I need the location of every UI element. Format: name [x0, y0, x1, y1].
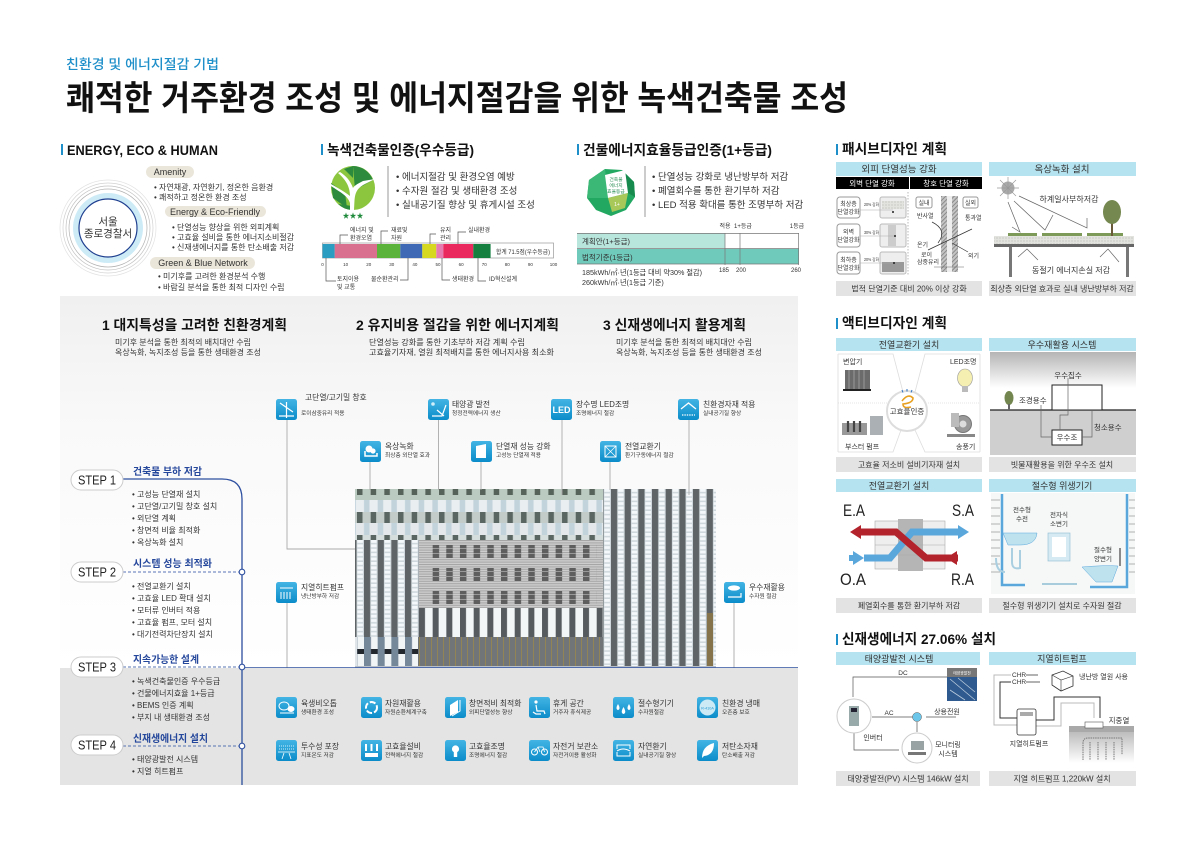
chart: score bar: 에너지 및 — [350, 226, 374, 234]
pill: amenity: Amenity — [154, 167, 187, 177]
heading: energy efficiency: 건물에너지효율등급인증(1+등급) — [583, 142, 772, 158]
step 3: • 건물에너지효율 1+등급 — [132, 688, 215, 698]
card: solar: 태양광발전(PV) 시스템 146kW 설치 — [847, 774, 969, 784]
diagram: rainwater: 우수조 — [1057, 433, 1077, 442]
step 3: STEP 3 — [78, 660, 116, 674]
chart: score bar: 환경오염 — [350, 234, 372, 242]
diagram: wall sections: 단열강화 — [837, 208, 860, 216]
icon: natural ventilation: 실내공기질 향상 — [638, 751, 677, 759]
title: 쾌적한 거주환경 조성 및 에너지절감을 위한 녹색건축물 조성 — [66, 80, 848, 118]
chart: score bar: 70 — [482, 262, 487, 267]
chart: score bar: 80 — [505, 262, 510, 267]
icon: water saving: 수자원절감 — [638, 708, 665, 716]
diagram: wall sections: 단열강화 — [837, 236, 860, 244]
text: energy bullets: • 고효율 설비을 통한 에너지소비절감 — [172, 232, 295, 242]
chart: score bar: 재료및 — [391, 226, 408, 234]
icon: biotope — [276, 697, 337, 718]
diagram: window section: 삼중유리 — [917, 258, 939, 266]
diagram: window section: 온기 — [917, 241, 928, 249]
chart: efficiency bars: 185 — [719, 268, 730, 274]
diagram: rainwater: 조경용수 — [1019, 395, 1047, 405]
text: efficiency notes — [582, 268, 702, 287]
heading: plan 1: 미기후 분석을 통한 최적의 배치대안 수립 — [115, 337, 251, 347]
feature: geothermal heat pump — [276, 582, 344, 603]
card: envelope insulation — [836, 162, 982, 296]
feature: rooftop greening: 최상층 외단열 효과 — [385, 451, 431, 459]
diagram: HRV airflow: R.A — [951, 570, 975, 589]
step 2: • 고효율 LED 확대 설치 — [132, 593, 211, 603]
step 1: • 외단열 계획 — [132, 513, 176, 523]
text: green bullets: • 에너지절감 및 환경오염 예방 — [396, 171, 515, 183]
diagram: wall sections: 20% 강화 — [864, 201, 879, 208]
text: amenity bullets — [154, 182, 273, 202]
step 1: • 고단열/고기밀 창호 설치 — [132, 501, 217, 511]
feature: solar power: 태양광 발전 — [452, 399, 490, 409]
step 4: 신재생에너지 설치 — [133, 732, 208, 745]
diagram: geothermal system: 지열히트펌프 — [1010, 739, 1049, 748]
text: network bullets: • 미기후를 고려한 환경분석 수행 — [158, 271, 265, 281]
step 2 — [71, 557, 213, 639]
icon: efficiency badge: 에너지 — [609, 182, 623, 189]
text: energy bullets: • 단열성능 향상을 위한 외피계획 — [172, 222, 279, 232]
diagram: high efficiency hub: 변압기 — [843, 357, 862, 366]
feature: heat recovery ventilator: 환기구동에너지 절감 — [625, 451, 674, 459]
card: geothermal: 지열히트펌프 — [1037, 653, 1087, 664]
feature: LED lighting: LED — [552, 405, 571, 415]
diagram: high efficiency hub: LED조명 — [950, 357, 976, 366]
icon: bicycle storage: 자전거 보관소 — [553, 741, 598, 751]
diagram: window section: 통과열 — [965, 214, 982, 222]
diagram: solar system — [837, 668, 977, 763]
diagram: window section — [916, 196, 982, 272]
diagram: sanitary fixtures: 절수형 — [1094, 546, 1112, 554]
icon: high efficiency equipment — [361, 740, 424, 761]
card: rainwater system: 빗물재활용을 위한 우수조 설치 — [1011, 460, 1113, 470]
text: green bullets — [396, 171, 535, 211]
chart: score bar: 30 — [389, 262, 395, 267]
diagram: rainwater: 우수집수 — [1054, 370, 1082, 380]
icon: efficiency badge: 건축물 — [609, 176, 623, 183]
icon: water saving — [613, 697, 674, 718]
diagram: HRV airflow: S.A — [952, 501, 975, 520]
heading: plan 2: 단열성능 강화를 통한 기초부하 저감 계획 수립 — [369, 337, 525, 347]
pill: amenity — [146, 166, 194, 178]
panel: green building certification — [321, 142, 558, 291]
text: energy bullets — [172, 222, 295, 252]
chart: score bar: 및 교통 — [337, 284, 356, 291]
panel: passive design — [836, 141, 1136, 296]
heading: plan 2: 2 유지비용 절감을 위한 에너지계획 — [356, 317, 559, 333]
text: efficiency bullets: • 단열성능 강화로 냉난방부하 저감 — [652, 171, 789, 183]
icon: high efficiency lighting: 고효율조명 — [469, 741, 505, 751]
card: envelope insulation: 외피 단열성능 강화 — [861, 164, 937, 176]
diagram: geothermal system: CHR — [1012, 672, 1026, 679]
icon: tree logo — [331, 166, 375, 220]
heading: plan 3: 미기후 분석을 통한 최적의 배치대안 수립 — [616, 337, 752, 347]
heading: energy eco human: ENERGY, ECO & HUMAN — [67, 142, 218, 158]
feature: insulation performance — [471, 441, 551, 462]
chart: score bar: 40 — [412, 262, 418, 267]
diagram: solar system: 시스템 — [938, 750, 958, 758]
panel: renewable energy — [836, 631, 1136, 786]
icon: window ratio — [445, 697, 521, 718]
diagram: concentric circles: 서울 — [98, 216, 118, 228]
timeline line — [123, 479, 242, 785]
icons row 1 — [276, 697, 760, 718]
feature: heat recovery ventilator — [600, 441, 674, 462]
heading: plan 3: 옥상녹화, 녹지조성 등을 통한 생태환경 조성 — [616, 347, 762, 357]
step 3: • 녹색건축물인증 우수등급 — [132, 676, 220, 686]
diagram: window section: 반사열 — [917, 212, 934, 220]
icon: permeable paving: 투수성 포장 — [301, 741, 339, 751]
feature: rooftop greening: 옥상녹화 — [385, 441, 414, 451]
step 2: • 고효율 펌프, 모터 설치 — [132, 617, 212, 627]
feature: geothermal heat pump: 냉난방부하 저감 — [301, 592, 340, 600]
chart: score bar: 50 — [435, 262, 441, 267]
step 2: • 대기전력차단장치 설치 — [132, 629, 213, 639]
heading: active: 액티브디자인 계획 — [842, 315, 947, 331]
feature: solar power — [428, 399, 501, 420]
feature: insulation performance: 단열재 성능 강화 — [496, 441, 551, 451]
feature: LED lighting: 조명에너지 절감 — [576, 409, 615, 417]
chart: score bar: 물순환관리 — [371, 275, 399, 283]
chart: score bar: 100 — [550, 262, 558, 267]
heading: plan 1: 옥상녹화, 녹지조성 등을 통한 생태환경 조성 — [115, 347, 261, 357]
chart: efficiency bars: 200 — [736, 268, 747, 274]
text: green bullets: • 실내공기질 향상 및 휴게시설 조성 — [396, 199, 535, 211]
text: energy bullets: • 신재생에너지를 통한 탄소배출 저감 — [172, 242, 295, 252]
step 3 — [71, 653, 220, 722]
card: envelope insulation: 창호 단열 강화 — [923, 178, 969, 188]
icon: recycling: 자원재활용 — [385, 698, 421, 708]
panel: active design — [836, 315, 1136, 613]
text: efficiency bullets — [652, 171, 804, 211]
feature: high insulation windows — [276, 392, 367, 420]
chart: score bar: 90 — [528, 262, 533, 267]
text: green bullets: • 수자원 절감 및 생태환경 조성 — [396, 185, 517, 197]
chart: efficiency bars: 적용 — [719, 223, 731, 230]
text: efficiency notes: 260kWh/㎡·년(1등급 기준) — [582, 278, 664, 287]
heading: plan 3 — [603, 317, 762, 357]
card: heat recovery ventilator — [836, 479, 982, 613]
diagram: sanitary fixtures: 소변기 — [1050, 519, 1068, 528]
card: solar — [836, 652, 980, 786]
chart: score bar — [321, 226, 558, 291]
chart: efficiency bars: 1+등급 — [734, 223, 752, 230]
panel: energy efficiency certification — [577, 142, 805, 287]
icon: bicycle storage: 자전거이용 활성화 — [553, 751, 597, 759]
chart: score bar: 생태환경 — [452, 275, 474, 283]
step 1: • 창면적 비율 최적화 — [132, 525, 201, 535]
diagram: solar system: AC — [884, 710, 894, 717]
icon: tree logo: ★★★ — [342, 212, 364, 220]
diagram: window section: 외기 — [968, 252, 979, 260]
diagram: solar system: DC — [898, 670, 908, 677]
diagram: sanitary fixtures: 양변기 — [1094, 554, 1112, 563]
icon: efficiency badge: 효율등급 — [607, 189, 625, 195]
diagram: green roof: 동절기 에너지손실 저감 — [1032, 265, 1111, 275]
chart: score bar: 10 — [343, 262, 349, 267]
steps timeline — [71, 465, 798, 785]
heading: plan 2: 고효율기자재, 열원 최적배치를 통한 에너지사용 최소화 — [369, 347, 554, 357]
step 1: 건축물 부하 저감 — [133, 465, 202, 478]
diagram: sanitary fixtures: 전자식 — [1050, 510, 1068, 519]
chart: efficiency bars — [577, 223, 805, 274]
feature: heat recovery ventilator: 전열교환기 — [625, 441, 661, 451]
diagram: green roof — [994, 177, 1134, 277]
diagram: concentric circles — [60, 180, 156, 276]
icon: bicycle storage — [529, 740, 598, 761]
icon: natural ventilation — [613, 740, 677, 761]
icon: high efficiency lighting: 조명에너지 절감 — [469, 751, 508, 759]
feature: eco materials — [678, 399, 755, 420]
diagram: window section: 로이 — [921, 251, 932, 259]
feature: geothermal heat pump: 지열히트펌프 — [301, 582, 344, 592]
text: amenity bullets: • 쾌적하고 정온한 환경 조성 — [154, 192, 247, 202]
icons row 2 — [276, 740, 758, 761]
diagram: wall sections: 단열강화 — [837, 264, 860, 272]
feature: insulation performance: 고성능 단열재 적용 — [496, 451, 541, 459]
diagram: HRV airflow — [840, 501, 975, 589]
chart: score bar: 합계 71.5점(우수등급) — [496, 248, 550, 256]
background — [60, 296, 798, 668]
card: roof greening: 최상층 외단열 효과로 실내 냉난방부하 저감 — [990, 284, 1134, 294]
chart: score bar: 실내환경 — [468, 226, 490, 234]
feature: rainwater reuse: 우수재활용 — [749, 582, 785, 592]
icon: efficiency badge: 1+ — [614, 202, 620, 208]
chart: score bar: 20 — [366, 262, 372, 267]
diagram: geothermal system: CHR — [1012, 679, 1026, 686]
card: high efficiency equipment: 고효율 저소비 설비기자재 설치 — [858, 460, 960, 470]
text: efficiency bullets: • 폐열회수를 통한 환기부하 저감 — [652, 185, 780, 197]
diagram: wall sections: 최하층 — [840, 256, 857, 264]
diagram: wall sections: 최상층 — [840, 200, 857, 208]
feature: rooftop greening — [360, 441, 431, 462]
feature: eco materials: 친환경자재 적용 — [703, 399, 755, 409]
subtitle: 친환경 및 에너지절감 기법 — [66, 57, 219, 72]
feature: rainwater reuse: 수자원 절감 — [749, 592, 778, 600]
diagram: high efficiency hub: 부스터 펌프 — [845, 442, 880, 451]
icon: rest area: 휴게 공간 — [553, 698, 584, 708]
divider — [644, 166, 646, 217]
step 3: 지속가능한 설계 — [133, 653, 199, 666]
icon: low carbon material: 탄소배출 저감 — [722, 751, 756, 759]
icon: eco refrigerant: 오존층 보호 — [722, 708, 750, 716]
heading: plan 2 — [356, 317, 559, 357]
diagram: wall sections — [837, 192, 908, 275]
step 4: • 지열 히트펌프 — [132, 766, 183, 776]
diagram: high efficiency hub: 송풍기 — [956, 442, 975, 451]
diagram: solar system: 모니터링 — [935, 740, 961, 749]
icon: high efficiency equipment: 전력에너지 절감 — [385, 751, 424, 759]
card: high efficiency equipment: 전열교환기 설치 — [879, 339, 939, 350]
chart: score bar: 자원 — [391, 234, 402, 242]
feature: rainwater reuse — [724, 582, 785, 603]
diagram: rainwater: 청소용수 — [1094, 423, 1122, 432]
pill: energy eco-friendly: Energy & Eco-Friendly — [170, 207, 261, 217]
feature: LED lighting — [551, 399, 629, 420]
icon: natural ventilation: 자연환기 — [638, 741, 667, 751]
icon: biotope: 생태환경 조성 — [301, 708, 334, 716]
heading: plan 3: 3 신재생에너지 활용계획 — [603, 317, 746, 333]
diagram: geothermal system: 냉난방 열원 사용 — [1079, 672, 1129, 681]
card: water saving fixtures: 절수형 위생기기 설치로 수자원 절감 — [1002, 600, 1122, 610]
divider — [388, 166, 389, 217]
icon: high efficiency lighting — [445, 740, 508, 761]
text: efficiency bullets: • LED 적용 확대를 통한 조명부하 저감 — [652, 199, 804, 211]
feature: high insulation windows: 고단열/고기밀 창호 — [305, 392, 367, 402]
chart: efficiency bars: 계획안(1+등급) — [582, 236, 631, 246]
heading: plan 1: 1 대지특성을 고려한 친환경계획 — [102, 317, 287, 333]
feature: eco materials: 실내공기질 향상 — [703, 409, 742, 417]
diagram: solar system: 태양광발전 — [953, 670, 971, 676]
card: solar: 태양광발전 시스템 — [865, 653, 933, 664]
diagram: HRV airflow: O.A — [840, 570, 867, 589]
diagram: HRV airflow: E.A — [843, 501, 866, 520]
chart: efficiency bars: 260 — [791, 268, 802, 274]
icon: eco refrigerant — [697, 697, 760, 718]
chart: score bar: 0 — [321, 262, 324, 267]
icon: permeable paving: 지표온도 저감 — [301, 751, 335, 759]
diagram: sanitary fixtures: 전수형 — [1013, 505, 1031, 514]
diagram: green roof: 하계일사부하저감 — [1040, 194, 1099, 204]
card: heat recovery ventilator: 전열교환기 설치 — [869, 480, 929, 491]
chart: score bar: 관리 — [440, 234, 451, 242]
ground band — [60, 668, 798, 785]
step 4: • 태양광발전 시스템 — [132, 754, 198, 764]
diagram: high efficiency hub: 고효율인증 — [890, 406, 924, 416]
step 1: • 고성능 단열재 설치 — [132, 489, 200, 499]
card: geothermal: 지열 히트펌프 1,220kW 설치 — [1013, 774, 1111, 784]
step 3: • BEMS 인증 계획 — [132, 700, 194, 710]
diagram: window section: 실내 — [918, 199, 930, 207]
icon: rest area: 거주자 휴식제공 — [553, 708, 591, 716]
card: heat recovery ventilator: 폐열회수를 통한 환기부하 저감 — [858, 600, 961, 610]
diagram: geothermal system — [994, 671, 1134, 763]
chart: score bar: 유지 — [440, 226, 451, 234]
feature: solar power: 청정전력에너지 생산 — [452, 409, 501, 417]
card: rainwater system — [989, 338, 1136, 472]
icon: biotope: 육생비오톱 — [301, 698, 337, 708]
icon: low carbon material: 저탄소자재 — [722, 741, 758, 751]
icon: recycling: 자원순환체계구축 — [385, 708, 427, 716]
icon: low carbon material — [697, 740, 758, 761]
card: water saving fixtures: 절수형 위생기기 — [1032, 480, 1092, 491]
heading: plan 1 — [102, 317, 287, 357]
chart: efficiency bars: 1등급 — [790, 223, 805, 230]
step 1 — [71, 465, 217, 547]
card: envelope insulation: 외벽 단열 강화 — [849, 178, 895, 188]
icon: eco refrigerant: 친환경 냉매 — [722, 698, 760, 708]
text: network bullets: • 바람길 분석을 통한 최적 디자인 수립 — [158, 282, 285, 292]
chart: efficiency bars: 법적기준(1등급) — [582, 252, 633, 262]
diagram: wall sections: 20% 강화 — [864, 256, 879, 263]
chart: score bar: 60 — [459, 262, 464, 267]
diagram: rainwater — [990, 352, 1136, 455]
diagram: solar system: 인버터 — [863, 733, 883, 742]
card: roof greening: 옥상녹화 설치 — [1034, 164, 1090, 176]
step 4: STEP 4 — [78, 738, 116, 752]
step 4 — [71, 732, 208, 776]
building facade — [355, 489, 716, 668]
connector lines — [287, 420, 734, 668]
icon: window ratio: 외피단열성능 향상 — [469, 708, 513, 716]
icon: permeable paving — [276, 740, 339, 761]
card: high efficiency equipment — [836, 338, 982, 472]
chart: score bar: 토지이용 — [337, 275, 360, 283]
diagram: window section: 실외 — [965, 199, 976, 207]
pill: green blue network: Green & Blue Network — [158, 258, 248, 268]
step 2: STEP 2 — [78, 564, 116, 580]
icon: water saving: 절수형기기 — [638, 699, 674, 708]
step 2: 시스템 성능 최적화 — [133, 557, 212, 570]
panel: energy eco human — [60, 142, 295, 292]
heading: passive: 패시브디자인 계획 — [842, 141, 947, 157]
chart: score bar: ID혁신설계 — [489, 275, 517, 283]
icon: high efficiency equipment: 고효율설비 — [385, 741, 421, 751]
icon: window ratio: 창면적비 최적화 — [469, 698, 521, 708]
feature: high insulation windows: 로이삼중유리 적용 — [301, 409, 344, 417]
diagram: concentric circles: 종로경찰서 — [84, 227, 132, 240]
card: roof greening — [989, 162, 1136, 296]
diagram: wall sections: 외벽 — [843, 228, 854, 236]
feature: LED lighting: 장수명 LED조명 — [576, 399, 629, 409]
diagram: geothermal system: 지중열 — [1109, 716, 1129, 725]
text: network bullets — [158, 271, 285, 292]
diagram: wall sections: 30% 강화 — [864, 229, 879, 236]
panel: main building concept — [60, 296, 798, 785]
card: rainwater system: 우수재활용 시스템 — [1028, 339, 1096, 350]
step 2: • 전열교환기 설치 — [132, 581, 191, 591]
card: water saving fixtures — [989, 479, 1136, 613]
icon: recycling — [361, 697, 427, 718]
diagram: high efficiency hub — [838, 354, 980, 452]
step 1: STEP 1 — [78, 472, 116, 488]
step 1: • 옥상녹화 설치 — [132, 537, 183, 547]
step 2: • 모터류 인버터 적용 — [132, 605, 200, 615]
heading: renewable: 신재생에너지 27.06% 설치 — [842, 631, 996, 647]
icon: eco refrigerant: R-410A — [701, 706, 714, 710]
heading: green building: 녹색건축물인증(우수등급) — [327, 142, 474, 158]
diagram: sanitary fixtures — [991, 493, 1135, 594]
card: envelope insulation: 법적 단열기준 대비 20% 이상 강화 — [851, 284, 967, 294]
text: amenity bullets: • 자연채광, 자연환기, 정온한 음환경 — [154, 182, 273, 192]
diagram: solar system: 상용전원 — [934, 707, 960, 716]
step 3: • 부지 내 생태환경 조성 — [132, 712, 210, 722]
icon: efficiency badge — [587, 169, 635, 216]
card: geothermal — [989, 652, 1136, 786]
text: efficiency notes: 185kWh/㎡·년(1등급 대비 약30% 절감) — [582, 268, 702, 277]
icon: rest area — [529, 697, 591, 718]
diagram: sanitary fixtures: 수전 — [1016, 514, 1028, 523]
